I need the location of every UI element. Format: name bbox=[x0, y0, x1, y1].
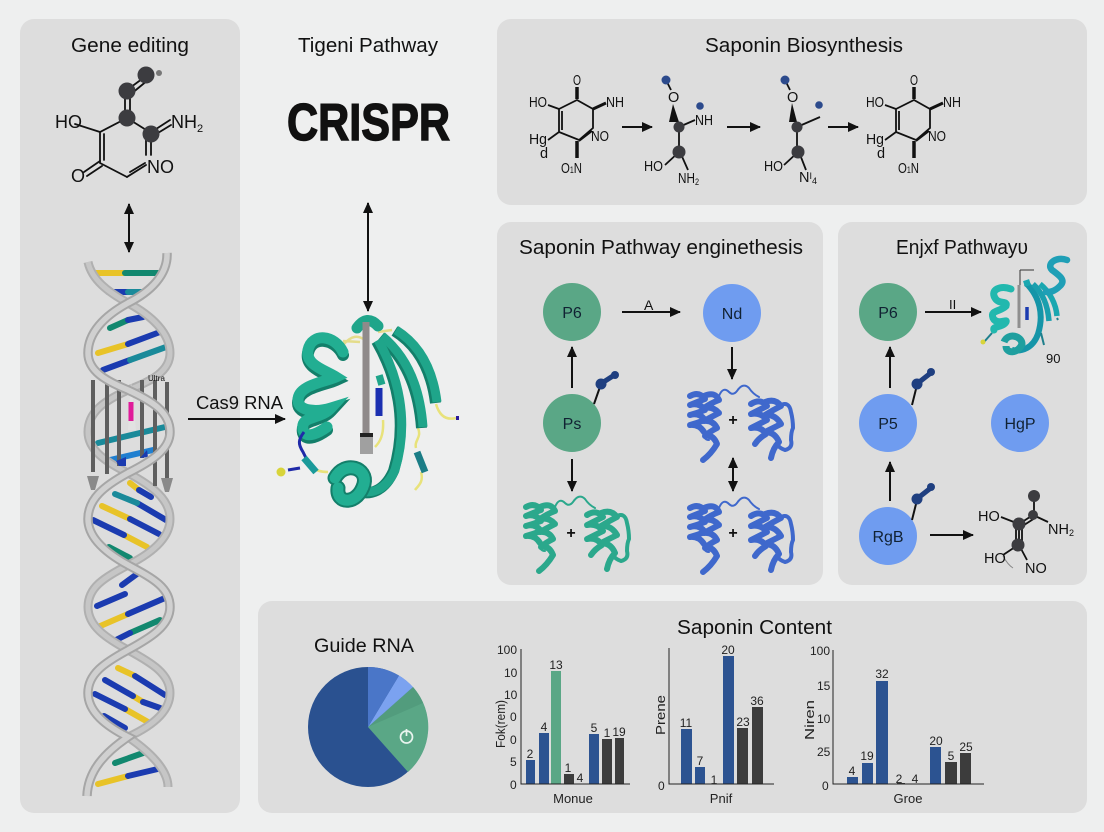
arrow: Ps to P6 bbox=[571, 347, 573, 388]
arrow: Nd down bbox=[731, 347, 733, 379]
bar chart: Monue: 1 bbox=[604, 726, 611, 740]
bar chart: Pnif: 36 bbox=[750, 694, 764, 708]
node: RgB: RgB bbox=[872, 529, 904, 546]
molecule: 2 bbox=[1069, 528, 1074, 538]
node: P5 bbox=[859, 394, 917, 452]
bar chart: Groe: 100 bbox=[810, 644, 830, 658]
molecule: product: d bbox=[877, 146, 885, 162]
molecule: product: O bbox=[910, 73, 918, 89]
bar chart: Pnif: 7 bbox=[697, 754, 704, 768]
CRISPR wordmark: CRISPR bbox=[287, 94, 450, 152]
bar chart: Monue: 4 bbox=[541, 720, 548, 734]
node: P6: P6 bbox=[562, 305, 582, 322]
panel: saponin content bbox=[258, 601, 1087, 813]
panel: saponin biosynthesis bbox=[497, 19, 1087, 205]
molecule: substrate: O1N bbox=[561, 161, 582, 177]
bar chart: Monue: 10 bbox=[504, 666, 518, 680]
bar chart: Groe: 2 bbox=[896, 772, 903, 786]
ligand on Ps bbox=[594, 371, 619, 404]
arrow: P6 to Nd bbox=[622, 297, 680, 313]
molecule: gene editing: NH bbox=[171, 112, 197, 132]
bar chart: Monue: 100 bbox=[497, 643, 517, 657]
bar chart: Groe: 32 bbox=[875, 667, 889, 681]
bar chart: Monue: 19 bbox=[612, 725, 626, 739]
molecule: substrate bbox=[529, 73, 624, 177]
node: RgB bbox=[859, 507, 917, 565]
node: Nd: Nd bbox=[722, 306, 742, 323]
bar chart: Monue: 10 bbox=[504, 688, 518, 702]
bar chart: Groe: 4 bbox=[849, 764, 856, 778]
DNA double helix bbox=[87, 253, 173, 796]
molecule: intermediate 1: NH bbox=[678, 171, 699, 187]
bar chart: Monue: 0 bbox=[510, 733, 517, 747]
panel: saponin pathway engineering bbox=[497, 222, 823, 585]
molecule: intermediate 2: HO bbox=[764, 159, 783, 175]
bar chart: Groe: Niren bbox=[802, 700, 817, 740]
heading: Saponin Pathway enginethesis bbox=[519, 237, 803, 259]
bar chart: Monue: 0 bbox=[510, 778, 517, 792]
protein: blue dimer bottom: + bbox=[728, 525, 738, 542]
ligand on P5 bbox=[912, 368, 935, 405]
molecule: intermediate 1 bbox=[644, 76, 713, 187]
arrow: RgB to P5 bbox=[889, 462, 891, 501]
bar chart: Groe: 25 bbox=[817, 745, 831, 759]
molecule: intermediate 2: N bbox=[799, 170, 809, 186]
ligand on RgB bbox=[912, 483, 935, 520]
bar chart: Pnif: 1 bbox=[711, 773, 718, 787]
molecule: gene editing: 2 bbox=[197, 123, 203, 135]
molecule: substrate: d bbox=[540, 146, 548, 162]
bar chart: Monue: 0 bbox=[510, 710, 517, 724]
node: P6 bbox=[859, 283, 917, 341]
bar chart: Groe: 10 bbox=[817, 712, 831, 726]
arrow: CRISPR to protein bbox=[367, 203, 369, 311]
node: Ps: Ps bbox=[563, 416, 581, 433]
arrow: Ps to protein bbox=[571, 459, 573, 491]
molecule: product bbox=[866, 73, 961, 177]
node: HgP bbox=[991, 394, 1049, 452]
bar chart: Groe: Groe bbox=[894, 791, 922, 806]
protein: blue dimer top bbox=[690, 386, 793, 460]
bar chart: Monue: 13 bbox=[549, 658, 563, 672]
bar chart: Monue: 2 bbox=[527, 747, 534, 761]
molecule: product: NO bbox=[928, 129, 946, 145]
molecule: intermediate 1: NH bbox=[695, 113, 713, 129]
pie chart bbox=[308, 667, 428, 787]
heading: saponin biosynthesis: Saponin Biosynthesis bbox=[705, 35, 903, 57]
molecule bbox=[978, 490, 1074, 577]
heading: gene editing: Gene editing bbox=[71, 35, 189, 57]
bar chart: Monue: 5 bbox=[510, 755, 517, 769]
arrow: P6 to protein bbox=[925, 297, 981, 312]
molecule: substrate: NH bbox=[606, 95, 624, 111]
molecule: NO bbox=[1025, 561, 1047, 577]
node: P6: P6 bbox=[878, 305, 898, 322]
bar chart: Monue: Monue bbox=[553, 791, 593, 806]
molecule: intermediate 1: HO bbox=[644, 159, 663, 175]
molecule: substrate: Hg bbox=[529, 132, 547, 148]
bar chart: Pnif: 20 bbox=[721, 643, 735, 657]
molecule: NH bbox=[1048, 522, 1069, 538]
panel: gene editing bbox=[20, 19, 240, 813]
heading: saponin content: Saponin Content bbox=[677, 617, 832, 639]
molecule: gene editing: HO bbox=[55, 112, 82, 132]
molecule: HO bbox=[978, 509, 1000, 525]
arrow: P5 to P6 bbox=[889, 347, 891, 388]
bar chart: Pnif: Pnif bbox=[710, 791, 733, 806]
molecule: intermediate 2 bbox=[764, 76, 823, 186]
arrow bbox=[828, 126, 858, 128]
molecule: intermediate 2: I bbox=[809, 171, 812, 181]
molecule: gene editing: NO bbox=[147, 157, 174, 177]
molecule: product: Hg bbox=[866, 132, 884, 148]
molecule: intermediate 2: O bbox=[787, 90, 798, 106]
arrow: Cas9 RNA to protein bbox=[188, 418, 285, 420]
DNA double helix: Ultra bbox=[148, 374, 165, 383]
node: P5: P5 bbox=[878, 416, 898, 433]
molecule: substrate: HO bbox=[529, 95, 547, 111]
arrow bbox=[622, 126, 652, 128]
bar chart: Pnif: 23 bbox=[736, 715, 750, 729]
protein: blue dimer bottom bbox=[690, 498, 793, 572]
label: Cas9 RNA: Cas9 RNA bbox=[196, 393, 283, 413]
bar chart: Monue bbox=[493, 643, 630, 806]
protein: green dimer: + bbox=[566, 525, 576, 542]
bar chart: Groe: 20 bbox=[929, 734, 943, 748]
molecule: product: NH bbox=[943, 95, 961, 111]
bar chart: Monue: 1 bbox=[565, 761, 572, 775]
bar chart: Groe: 25 bbox=[959, 740, 973, 754]
arrow: protein exchange bbox=[732, 458, 734, 491]
bar chart: Monue: 5 bbox=[591, 721, 598, 735]
protein: blue dimer top: + bbox=[728, 412, 738, 429]
bar chart: Groe: 15 bbox=[817, 679, 831, 693]
arrow: P6 to Nd: A bbox=[644, 297, 654, 313]
panel: enzyme pathway bbox=[838, 222, 1087, 585]
heading: pathway: Tigeni Pathway bbox=[298, 35, 438, 57]
guide rods bbox=[93, 380, 167, 486]
node: P6 bbox=[543, 283, 601, 341]
molecule: HO bbox=[984, 551, 1006, 567]
bar chart: Monue: 4 bbox=[577, 771, 584, 785]
bar chart: Groe: 0 bbox=[822, 779, 829, 793]
heading: Enjxf Pathwayυ bbox=[896, 237, 1028, 259]
protein: green dimer bbox=[526, 497, 629, 571]
molecule: intermediate 1: 2 bbox=[695, 177, 699, 187]
bar chart: Groe: 19 bbox=[860, 749, 874, 763]
bar chart: Pnif: Prene bbox=[653, 695, 668, 735]
bar chart: Groe: 4 bbox=[912, 772, 919, 786]
arrow: RgB to molecule bbox=[930, 534, 973, 536]
molecule: product: HO bbox=[866, 95, 884, 111]
label: 90: 90 bbox=[1046, 351, 1060, 366]
molecule: intermediate 2: 4 bbox=[812, 176, 817, 186]
bar chart: Pnif: 11 bbox=[680, 716, 693, 730]
protein: Cas9 ribbon structure bbox=[276, 320, 459, 500]
bar chart: Groe: 5 bbox=[948, 749, 955, 763]
node: Nd bbox=[703, 284, 761, 342]
molecule: intermediate 1: O bbox=[668, 90, 679, 106]
molecule: gene editing: O bbox=[71, 166, 85, 186]
molecule: gene editing bbox=[55, 66, 203, 186]
molecule: product: O1N bbox=[898, 161, 919, 177]
heading: guide RNA: Guide RNA bbox=[314, 636, 414, 657]
bar chart: Pnif bbox=[653, 643, 774, 806]
bar chart: Groe bbox=[802, 644, 984, 806]
arrow: molecule to DNA bbox=[128, 204, 130, 252]
node: Ps bbox=[543, 394, 601, 452]
bar chart: Monue: Fok(rem) bbox=[493, 700, 508, 748]
protein: cyan ribbon bbox=[980, 259, 1067, 352]
molecule: substrate: O bbox=[573, 73, 581, 89]
bar chart: Pnif: 0 bbox=[658, 779, 665, 793]
node: HgP: HgP bbox=[1004, 416, 1036, 433]
arrow: P6 to protein: II bbox=[949, 297, 956, 312]
molecule: substrate: NO bbox=[591, 129, 609, 145]
arrow bbox=[727, 126, 760, 128]
